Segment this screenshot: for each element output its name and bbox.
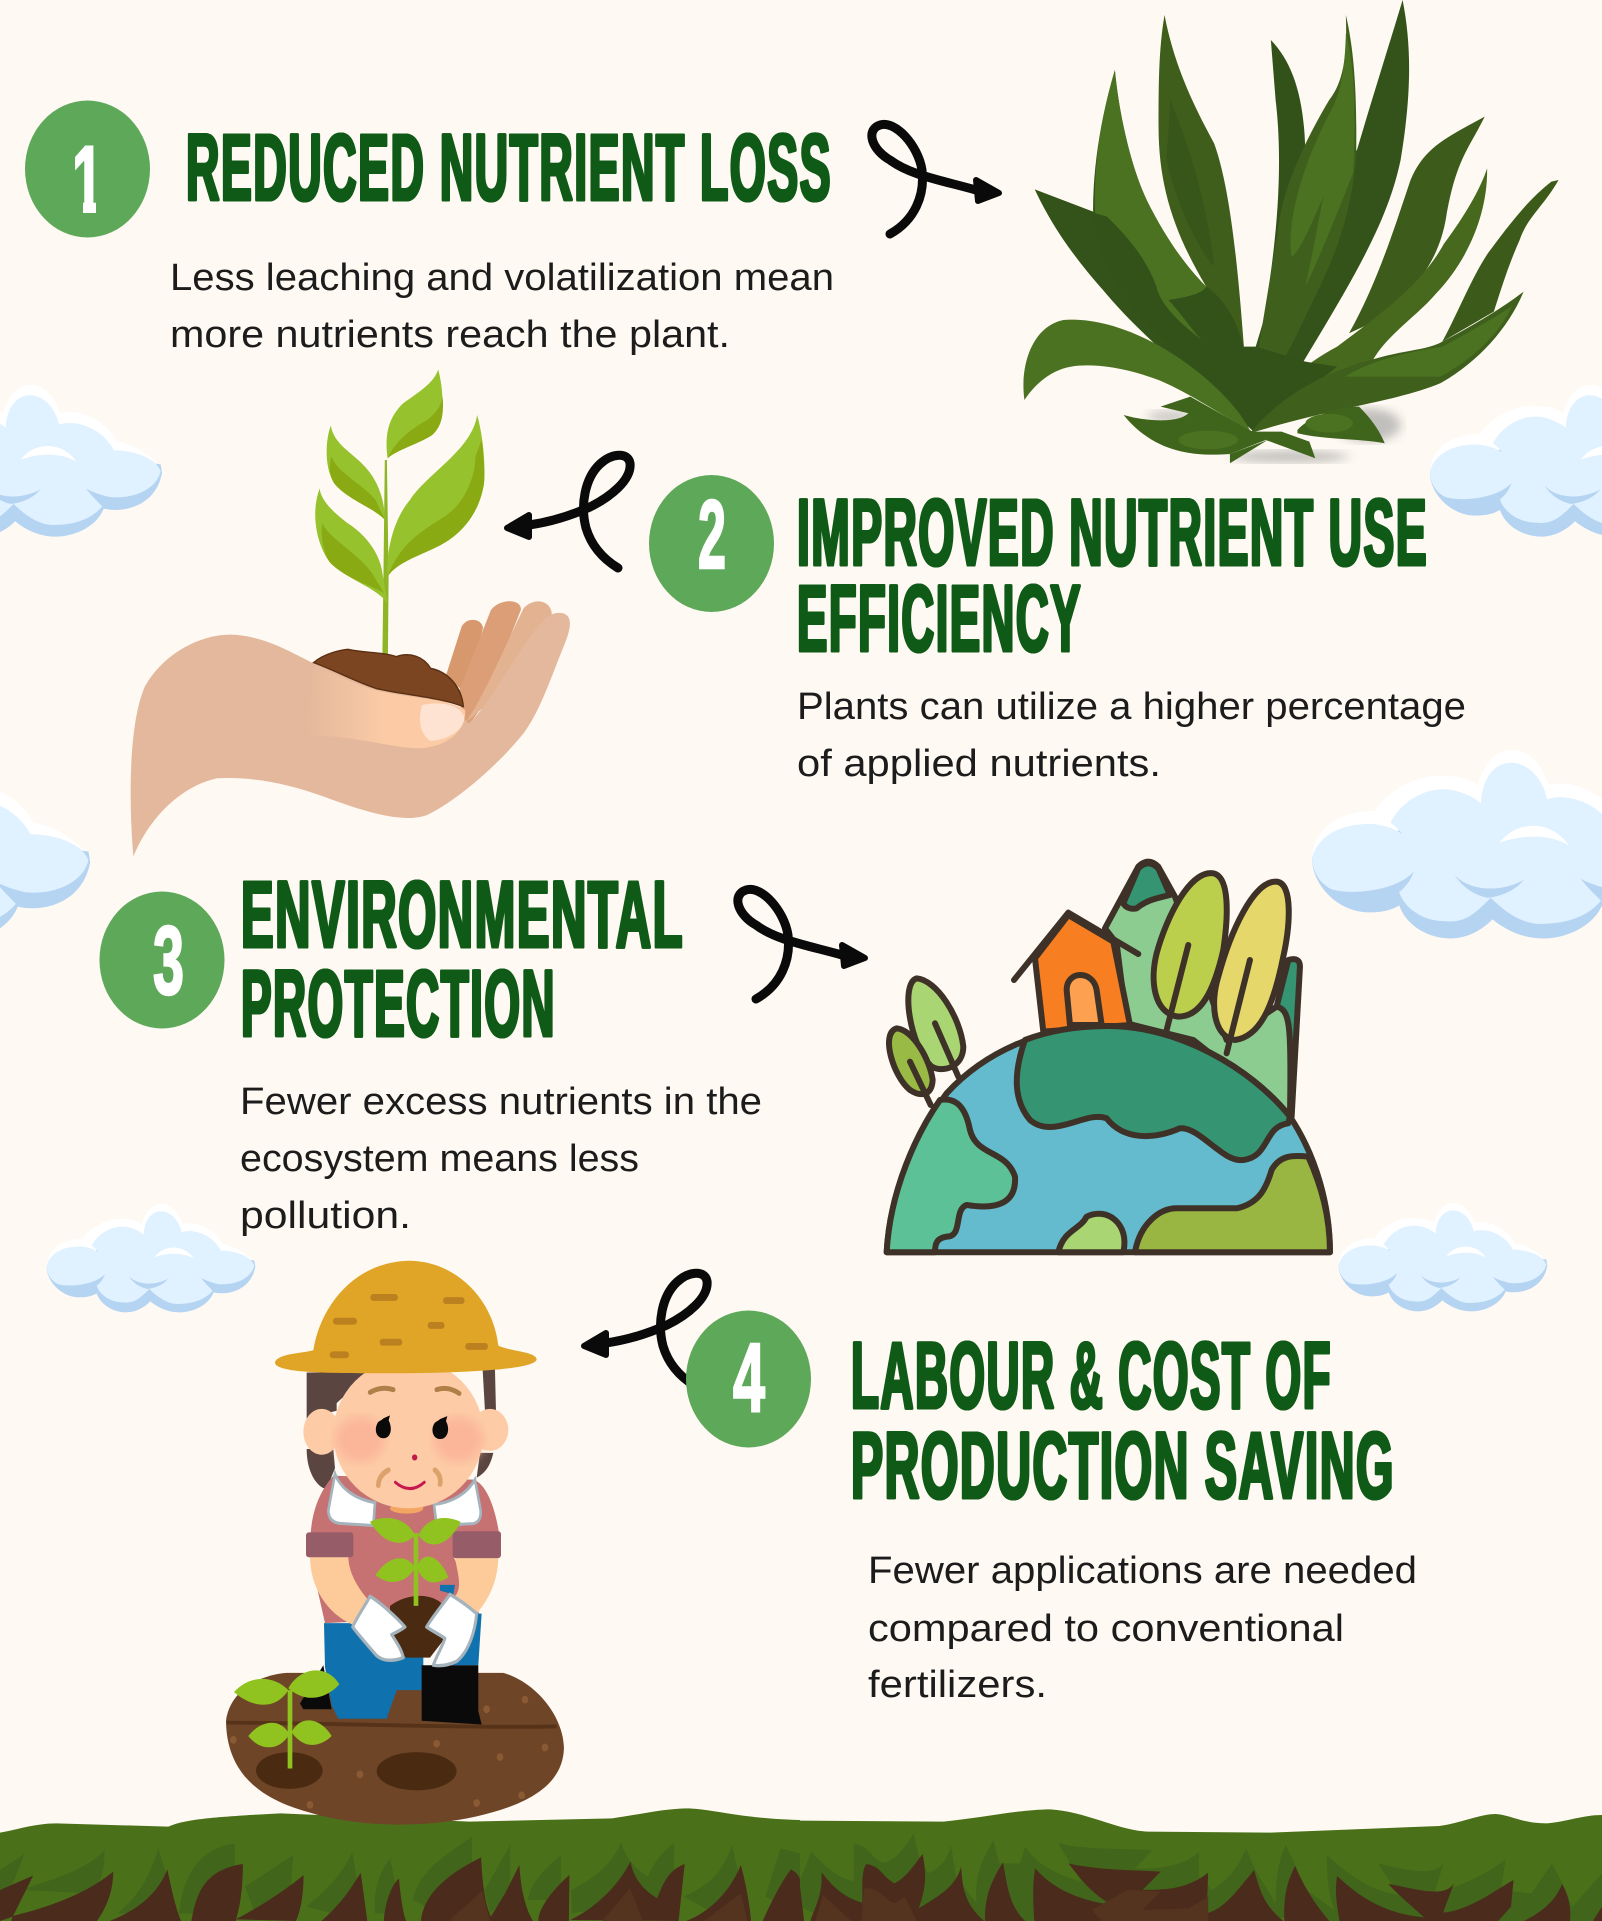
grass: right half — [800, 1809, 1602, 1921]
step 3 number badge — [100, 892, 224, 1028]
globe — [887, 1026, 1330, 1252]
mountains — [1105, 862, 1300, 1117]
soil — [314, 649, 463, 707]
step 1 number badge — [25, 100, 150, 238]
trees — [889, 873, 1289, 1105]
step 4 description: Fewer applications are needed — [868, 1550, 1417, 1592]
step 3 description — [240, 1081, 762, 1237]
cloud: small left — [47, 1204, 255, 1312]
gloves — [353, 1594, 477, 1666]
step 3 number badge: 3 — [153, 906, 184, 1015]
arrow: step 3 to earth — [738, 889, 865, 999]
step 4 description — [868, 1550, 1417, 1706]
thumb — [307, 665, 465, 748]
front boot — [422, 1665, 482, 1725]
step 4 description: compared to conventional — [868, 1608, 1344, 1650]
step 1 description — [170, 257, 834, 356]
step 2 number badge — [649, 475, 774, 612]
step 4 number badge — [686, 1310, 811, 1448]
infographic canvas: REDUCED NUTRIENT LOSS — [186, 115, 832, 221]
step 2 heading: EFFICIENCY — [797, 566, 1082, 672]
cloud: middle left — [0, 753, 90, 941]
step 4 description: fertilizers. — [868, 1664, 1047, 1706]
back boot — [300, 1665, 332, 1709]
seedling in hands — [370, 1518, 461, 1606]
icon: earth with house and trees — [887, 862, 1330, 1252]
arms — [310, 1556, 498, 1625]
icon: hand holding seedling — [131, 369, 570, 857]
step 3 description: Fewer excess nutrients in the — [240, 1081, 762, 1123]
house — [1014, 913, 1138, 1032]
towel collar — [328, 1474, 481, 1526]
cloud: large right — [1312, 750, 1602, 938]
arrow: step 2 to hand — [507, 455, 630, 568]
step 3 description: pollution. — [240, 1195, 411, 1237]
step 1 description: Less leaching and volatilization mean — [170, 257, 834, 299]
step 1 number badge: 1 — [72, 126, 103, 235]
hand palm — [131, 613, 570, 857]
icon: agave plant — [1023, 0, 1559, 463]
step 2 description: Plants can utilize a higher percentage — [797, 686, 1466, 728]
step 4 heading — [851, 1323, 1395, 1519]
step 2 heading — [797, 480, 1428, 672]
hair — [307, 1369, 496, 1489]
cloud: small right — [1339, 1203, 1547, 1311]
step 2 description — [797, 686, 1466, 785]
step 4 number badge: 4 — [733, 1323, 765, 1432]
shirt — [310, 1476, 500, 1623]
plant leaves — [315, 369, 484, 603]
soil mound — [226, 1673, 564, 1825]
step 3 heading: ENVIRONMENTAL — [241, 862, 684, 968]
sleeves — [306, 1531, 501, 1558]
arrow: step 1 to plant — [872, 124, 999, 234]
grass: left half — [0, 1808, 800, 1921]
trousers — [324, 1585, 482, 1719]
step 3 heading: PROTECTION — [241, 951, 556, 1057]
illustration: farmer planting seedling — [226, 1261, 564, 1825]
ears — [303, 1409, 508, 1455]
fingers — [446, 601, 552, 730]
face — [333, 1359, 483, 1508]
grass and soil ground strip — [0, 1808, 1602, 1921]
small seedling in ground — [234, 1670, 339, 1769]
arrow: step 4 to farmer — [584, 1273, 707, 1386]
thumb nail — [420, 704, 464, 741]
step 1 description: more nutrients reach the plant. — [170, 314, 730, 356]
soil ball — [390, 1596, 443, 1658]
cloud: upper left — [0, 385, 162, 537]
step 3 description: ecosystem means less — [240, 1138, 639, 1180]
step 3 heading — [241, 862, 684, 1057]
step 2 number badge: 2 — [698, 480, 726, 589]
cloud: upper right — [1430, 385, 1602, 537]
plant stem — [382, 460, 389, 655]
step 2 description: of applied nutrients. — [797, 743, 1161, 785]
straw hat — [275, 1261, 537, 1373]
